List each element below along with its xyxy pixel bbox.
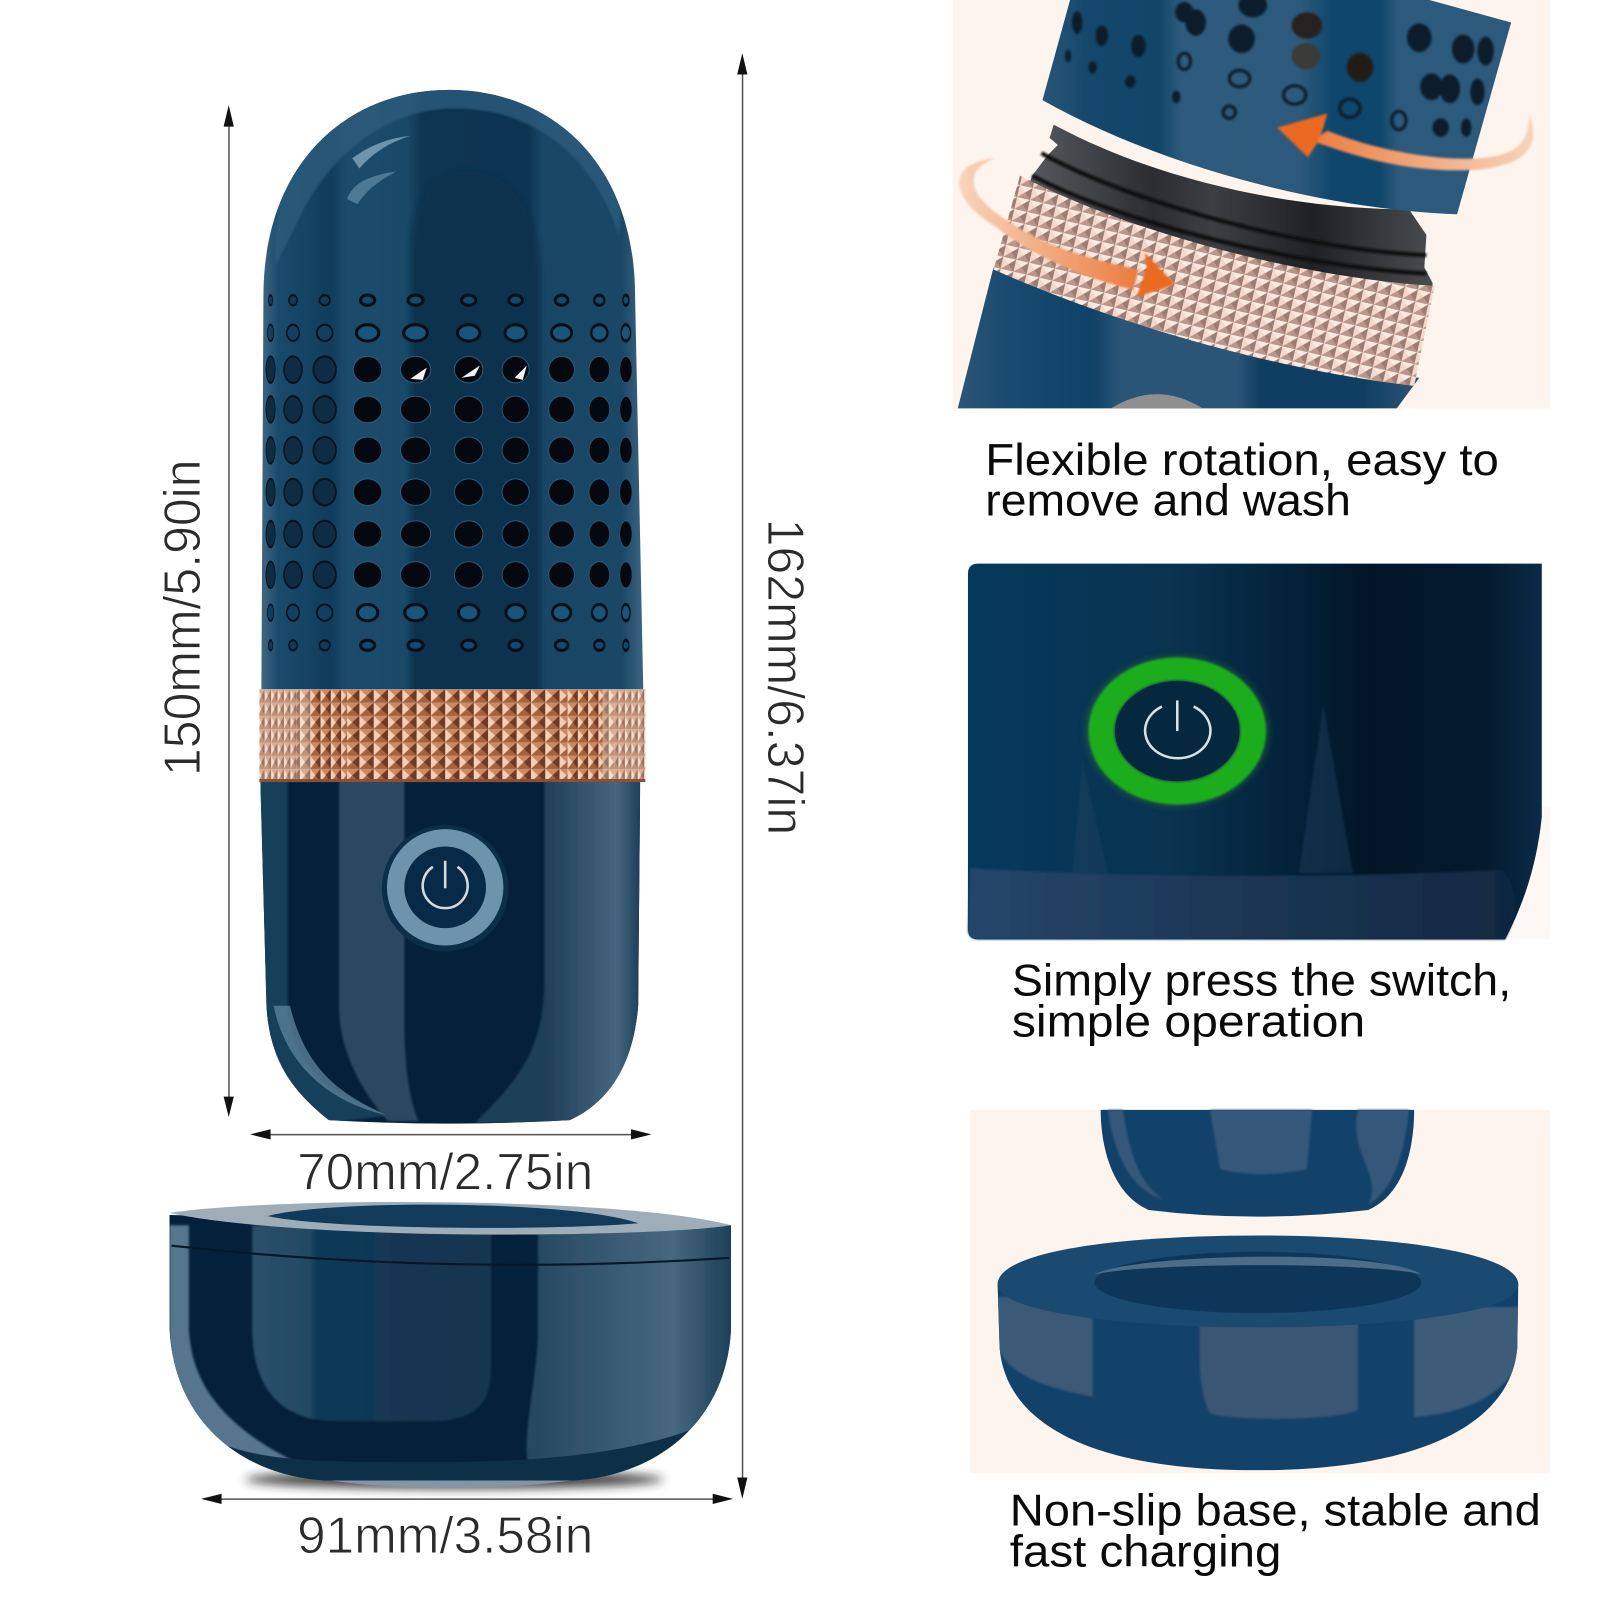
- arrow: capsule height: [224, 105, 234, 1117]
- dimension label: total height: 162mm/6.37in: [756, 519, 814, 835]
- charging base: [163, 1202, 735, 1489]
- lower body tone: [968, 868, 1515, 939]
- panel background: [970, 1110, 1550, 1473]
- bottom tone: [227, 1430, 689, 1480]
- panel: non-slip base: [970, 1110, 1550, 1576]
- caption: simple operation: [1012, 995, 1365, 1046]
- base top rim: [169, 1202, 731, 1235]
- green power ring: [1085, 656, 1269, 807]
- caption: [985, 434, 1499, 526]
- arrow: capsule width: [250, 1129, 651, 1139]
- base seam line: [172, 1246, 729, 1265]
- panel background: [953, 0, 1550, 408]
- capsule lower body: [255, 776, 648, 1133]
- capsule bottom: [1101, 1110, 1414, 1217]
- left edge crescent: [169, 1225, 306, 1481]
- icon: power symbol: [1145, 700, 1210, 758]
- centre panel: [252, 1225, 491, 1421]
- highlight wedge: [1072, 705, 1353, 873]
- dimension label: capsule height: 150mm/5.90in: [154, 459, 212, 776]
- upper cap with holes: [1031, 0, 1521, 220]
- power button: [382, 825, 508, 952]
- icon: power symbol: [423, 861, 468, 908]
- caption: Flexible rotation, easy to: [985, 434, 1499, 485]
- copper studded band: [259, 689, 645, 782]
- panel background glow: [1511, 807, 1550, 939]
- caption: fast charging: [1010, 1525, 1281, 1576]
- caption: Non-slip base, stable and: [1010, 1484, 1541, 1535]
- recess: [1095, 1252, 1421, 1313]
- base thin foot: [276, 1466, 633, 1488]
- dimension label: base width: 91mm/3.58in: [297, 1507, 593, 1565]
- icon: orange rotation arrow upper: [1277, 113, 1533, 170]
- lower body section: [958, 268, 1419, 408]
- caption: [1010, 1484, 1541, 1576]
- capsule upper perforated shell: [261, 71, 643, 705]
- perforation holes: [266, 295, 632, 650]
- product close-up: [968, 564, 1542, 939]
- base top surface: [998, 1235, 1518, 1327]
- base bowl: [990, 1235, 1521, 1475]
- base bowl body: [163, 1210, 735, 1486]
- right panel: [527, 1225, 735, 1483]
- caption: Simply press the switch,: [1012, 955, 1511, 1006]
- arrow: total height: [737, 53, 747, 1499]
- capsule purifier product: [255, 71, 648, 1133]
- base recess: [268, 1205, 638, 1228]
- dimension label: capsule width: 70mm/2.75in: [297, 1144, 593, 1202]
- panel: simple switch: [968, 564, 1550, 1046]
- caption: remove and wash: [985, 475, 1351, 526]
- icon: orange rotation arrow lower: [959, 158, 1175, 297]
- button edge: [1111, 394, 1203, 408]
- threaded neck: [1021, 125, 1433, 298]
- studded rose band: [993, 176, 1435, 386]
- panel: flexible rotation: [953, 0, 1550, 526]
- caption: [1012, 955, 1511, 1046]
- dimension arrows: [201, 53, 747, 1504]
- base shadow: [245, 1470, 664, 1489]
- arrow: base width: [201, 1494, 733, 1504]
